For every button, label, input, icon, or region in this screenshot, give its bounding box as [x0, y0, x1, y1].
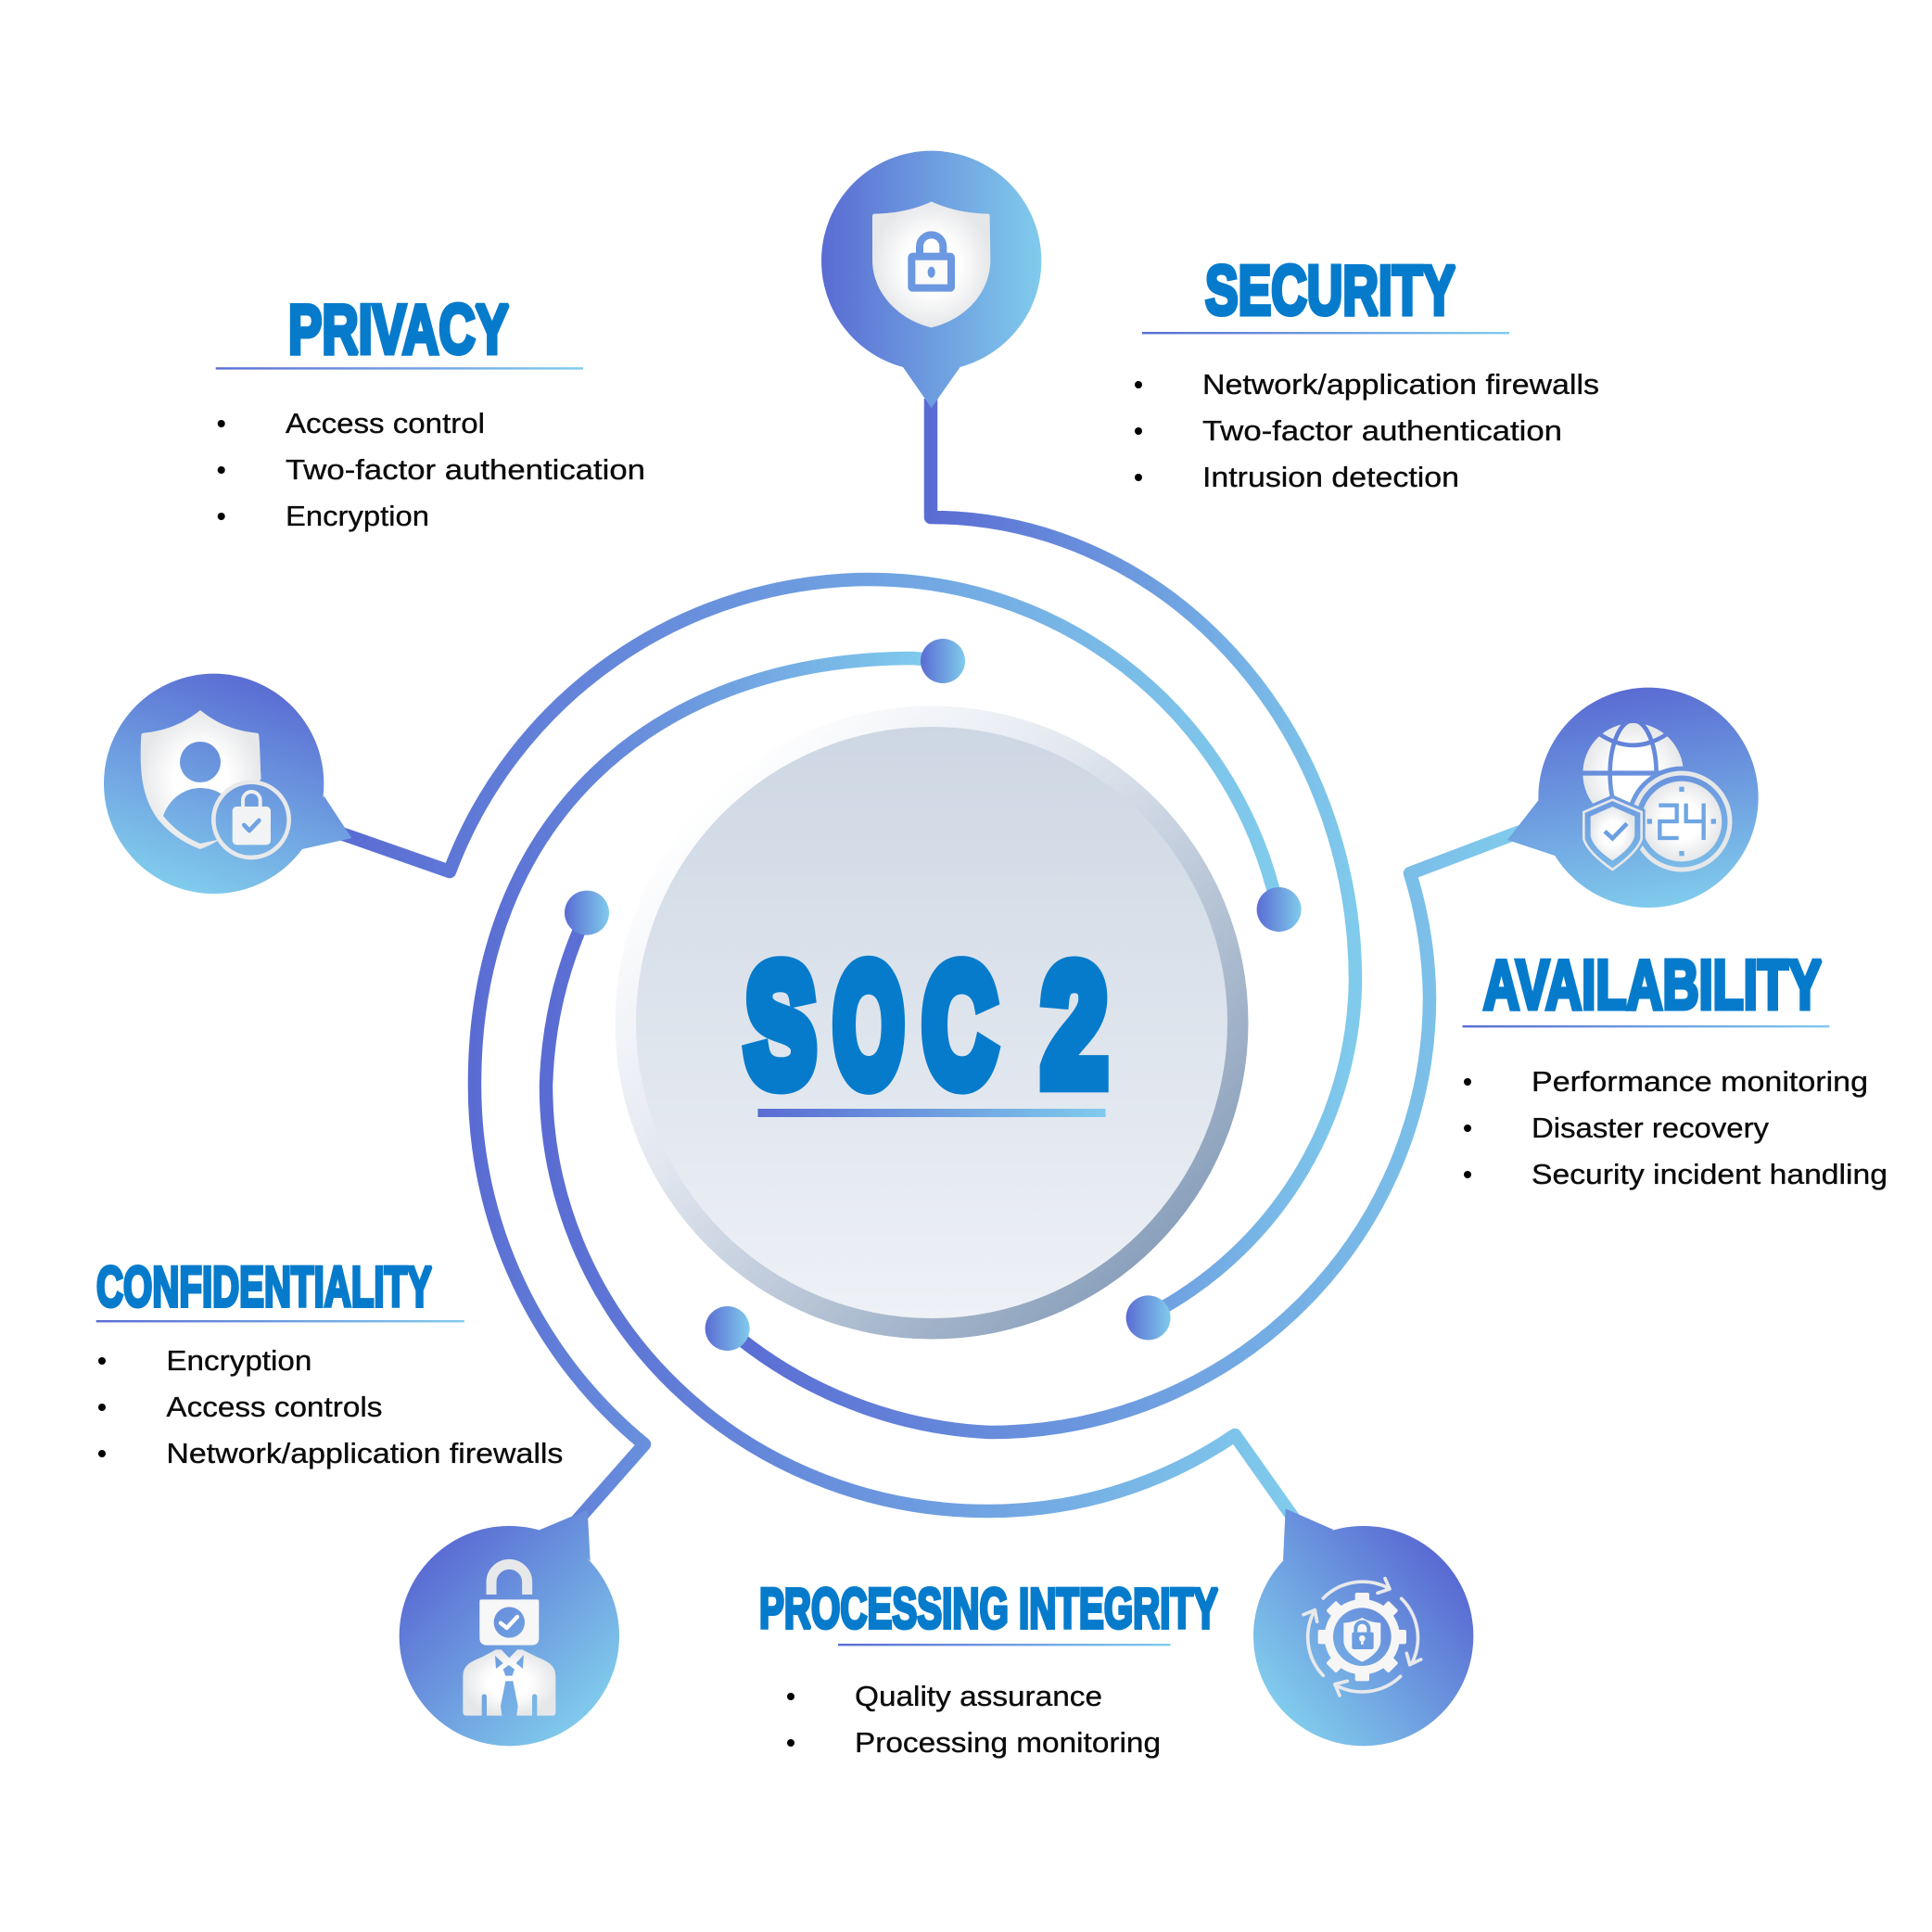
list: privacy items: Access control	[286, 407, 485, 439]
underline: security	[1142, 332, 1509, 334]
node dot: privacy end	[1257, 887, 1302, 932]
pin icon: security shield with padlock	[821, 151, 1041, 408]
list: availability items: Performance monitoring	[1532, 1065, 1868, 1098]
main title: SOC 2: C	[923, 931, 996, 1119]
list: processing integrity items: Processing monitoring	[855, 1726, 1161, 1759]
node dot: security end	[1126, 1295, 1171, 1340]
underline: availability	[1463, 1025, 1830, 1027]
list: privacy items: Encryption	[286, 500, 429, 532]
connector: confidentiality	[475, 658, 943, 1523]
title underline	[758, 1109, 1105, 1117]
list: availability items	[1464, 1065, 1888, 1190]
underline: confidentiality	[96, 1320, 464, 1322]
panel: security	[1135, 251, 1599, 493]
list: privacy items: Two-factor authentication	[286, 453, 645, 486]
underline: privacy	[216, 367, 583, 370]
list: confidentiality items: Network/application firewalls	[166, 1437, 563, 1469]
list: confidentiality items	[98, 1344, 563, 1469]
list: security items	[1135, 368, 1599, 493]
main title: SOC 2: O	[833, 931, 904, 1119]
list: security items: Network/application firewalls	[1202, 368, 1599, 400]
list: confidentiality items: Encryption	[166, 1344, 311, 1377]
heading: confidentiality: CONFIDENTIALITY	[96, 1255, 432, 1318]
list: processing integrity items	[787, 1680, 1161, 1759]
list: privacy items	[218, 407, 645, 532]
node dot: processing integrity end	[565, 891, 609, 935]
panel: privacy	[216, 290, 645, 532]
underline: processing integrity	[838, 1644, 1170, 1646]
pin icon: availability globe, shield and 24h clock	[1507, 688, 1759, 908]
central circle ring	[616, 706, 1248, 1339]
list: processing integrity items: Quality assurance	[855, 1680, 1102, 1712]
node dot: confidentiality end	[921, 639, 965, 683]
list: availability items: Security incident handling	[1532, 1158, 1888, 1190]
pin icon: confidentiality person with padlock head	[400, 1510, 619, 1746]
list: security items: Two-factor authentication	[1202, 414, 1562, 447]
connector: availability	[728, 832, 1520, 1432]
main title: SOC 2: S	[745, 932, 816, 1120]
connector: security	[931, 399, 1355, 1317]
panel: availability	[1463, 946, 1888, 1190]
central circle disc	[636, 727, 1227, 1318]
pin icon: processing integrity gear with shield and arrows	[1253, 1508, 1473, 1746]
list: availability items: Disaster recovery	[1532, 1112, 1770, 1144]
heading: privacy: PRIVACY	[288, 290, 509, 368]
pin icon: privacy shield with person and lock	[104, 674, 351, 894]
list: security items: Intrusion detection	[1202, 461, 1459, 493]
main title: SOC 2: 2	[1042, 931, 1107, 1120]
main title: SOC 2	[745, 931, 1107, 1120]
connector: privacy	[338, 579, 1278, 909]
panel: processing integrity	[759, 1577, 1218, 1759]
panel: confidentiality	[96, 1255, 563, 1469]
heading: security: SECURITY	[1205, 251, 1455, 329]
heading: processing integrity: PROCESSING INTEGRITY	[759, 1577, 1218, 1640]
list: confidentiality items: Access controls	[166, 1391, 382, 1423]
node dot: availability end	[705, 1306, 750, 1351]
connector: processing integrity	[546, 913, 1295, 1520]
